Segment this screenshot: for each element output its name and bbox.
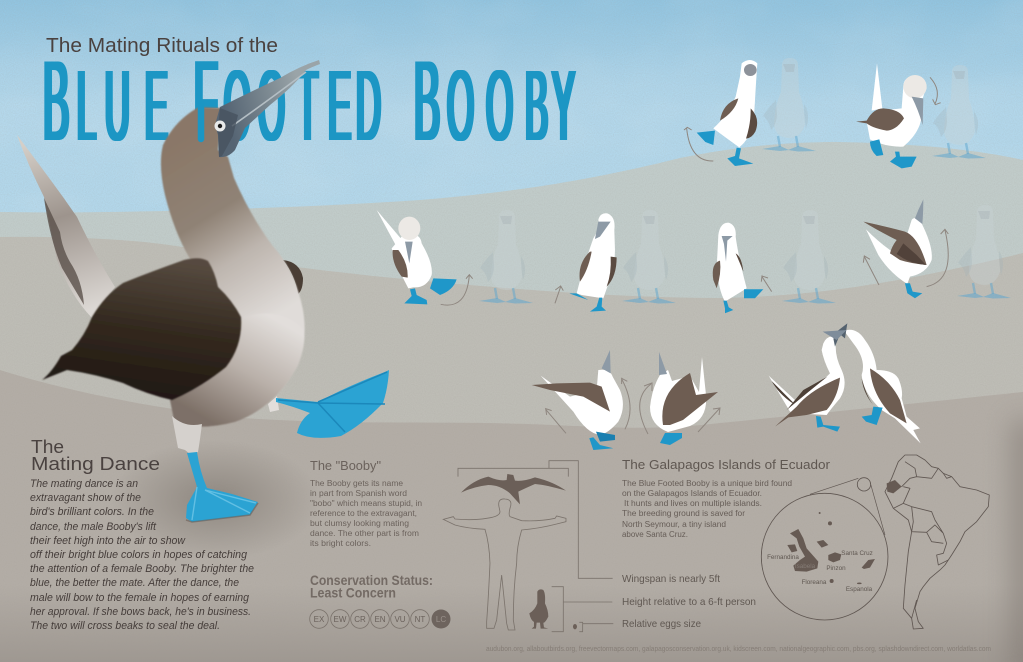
- title: B: [414, 38, 440, 165]
- ghost bird row 2 first: [479, 210, 533, 304]
- thigh feathers: [172, 416, 202, 454]
- text: galapagos description: It hunts and lives on multiple islands.: [624, 499, 762, 508]
- conservation status scale: NT: [415, 615, 425, 624]
- size comparison labels: Relative eggs size: [622, 618, 701, 630]
- heading: the mating dance: Mating Dance: [31, 454, 160, 474]
- subtitle: The Mating Rituals of the: [46, 35, 278, 57]
- heading: the booby: The "Booby": [310, 459, 381, 473]
- body and neck: [161, 107, 305, 427]
- text: mating dance description: their feet high into the air to show: [30, 535, 186, 547]
- text: mating dance description: male will bow to the female in hopes of earning: [30, 592, 250, 604]
- tail feather: [17, 135, 115, 318]
- text: mating dance description: [30, 478, 254, 632]
- title stroke passing over head: [198, 104, 204, 139]
- map labels: Pinzon: [826, 565, 846, 572]
- wing: [42, 258, 241, 400]
- head face and beak: [215, 60, 320, 157]
- heading: the mating dance: [31, 437, 160, 474]
- heading: conservation status: Conservation Status:: [310, 573, 433, 588]
- conservation status scale: LC: [436, 615, 446, 624]
- map labels: Isabela: [795, 563, 816, 570]
- text: mating dance description: The two will cross beaks to seal the deal.: [30, 620, 220, 632]
- title: [43, 38, 575, 165]
- dance step: one foot lifted, looking left: [555, 213, 617, 312]
- text: mating dance description: bird's brilliant colors. In the: [30, 506, 154, 518]
- map labels: Floreana: [802, 579, 827, 586]
- text: booby name origin: in part from Spanish word: [310, 489, 407, 498]
- text: galapagos description: above Santa Cruz.: [622, 530, 688, 539]
- heading: conservation status: Least Concern: [310, 586, 396, 600]
- dance step: head bowed, facing right: [856, 63, 941, 168]
- text: booby name origin: reference to the extravagant,: [310, 509, 417, 518]
- map labels: [767, 550, 873, 593]
- size comparison labels: [622, 573, 756, 630]
- dance step: bowing bird right: [640, 352, 720, 445]
- heading: the mating dance: The: [31, 437, 64, 457]
- dance step: bowing bird left: [532, 350, 630, 450]
- text: booby name origin: dance. The other part is from: [310, 529, 419, 538]
- ghost bird row 2 third: [782, 210, 836, 304]
- size comparison diagram: [443, 461, 613, 632]
- conservation status scale: CR: [354, 615, 366, 624]
- ghost bird row 2 fourth: [957, 205, 1011, 298]
- dance step: foot raised, facing right: [684, 60, 757, 166]
- title: OOBY: [447, 49, 575, 161]
- text: mating dance description: dance, the male Booby's lift: [30, 521, 157, 533]
- conservation status scale: EW: [334, 615, 347, 624]
- egg: [573, 624, 577, 629]
- text: galapagos description: The Blue Footed Booby is a unique bird found: [622, 479, 792, 488]
- text: booby name origin: but clumsy looking mating: [310, 519, 409, 528]
- raised blue foot: [276, 370, 389, 438]
- map labels: Santa Cruz: [841, 550, 873, 557]
- bird silhouette: [529, 589, 548, 629]
- heading: galapagos: The Galapagos Islands of Ecuador: [622, 457, 831, 472]
- dance step: wings spread, beak up: [863, 199, 948, 298]
- text: booby name origin: [310, 479, 422, 548]
- size comparison labels: Height relative to a 6-ft person: [622, 596, 756, 608]
- dance step: foot lifted, facing viewer: [713, 223, 772, 313]
- text: booby name origin: its bright colors.: [310, 539, 371, 548]
- pair crossing beaks: [769, 323, 921, 443]
- ghost bird row 1 left: [762, 58, 816, 152]
- eye: [214, 120, 226, 132]
- main bird illustration: [17, 60, 389, 522]
- bracket lines: [458, 461, 613, 632]
- map: south america: [761, 455, 989, 629]
- source credits: audubon.org, allaboutbirds.org, freevectormaps.com, galapagosconservation.org.uk, kidscreen.com, nationalgeographic.com, pbs.org, splashdowndirect.com, worldatlas.com: [486, 646, 991, 653]
- conservation status scale: [310, 610, 450, 628]
- islands: [790, 529, 818, 572]
- text: galapagos description: [622, 479, 792, 539]
- conservation status scale: EX: [314, 615, 325, 624]
- text: mating dance description: blue, the better the mate. After the dance, the: [30, 577, 239, 589]
- text: galapagos description: The breeding ground is saved for: [622, 509, 745, 518]
- text: mating dance description: extravagant show of the: [30, 492, 141, 504]
- ghost bird row 2 second: [622, 210, 676, 304]
- text: mating dance description: the attention of a female Booby. The brighter the: [30, 563, 254, 575]
- title: OOTED: [224, 49, 381, 161]
- ghost bird row 1 right: [932, 65, 986, 158]
- dance step: foot raised, head down: [377, 210, 473, 305]
- inset pointer and zoom circle: [857, 478, 871, 491]
- text: booby name origin: The Booby gets its name: [310, 479, 404, 488]
- standing blue foot: [186, 452, 258, 522]
- person outline: [443, 499, 566, 630]
- text: booby name origin: "bobo" which means stupid, in: [310, 499, 422, 508]
- text: mating dance description: off their bright blue colors in hopes of catching: [30, 549, 248, 561]
- conservation status scale: EN: [374, 615, 386, 624]
- far wing: [283, 260, 303, 294]
- text: mating dance description: The mating dance is an: [30, 478, 138, 490]
- title: LUE: [77, 49, 168, 161]
- map labels: Fernandina: [767, 554, 799, 561]
- wingspan silhouette: [461, 474, 566, 504]
- title: F: [194, 38, 218, 165]
- heading: conservation status: [310, 573, 433, 600]
- text: mating dance description: her approval. If she bows back, he's in business.: [30, 606, 251, 618]
- text: galapagos description: North Seymour, a tiny island: [622, 520, 726, 529]
- size comparison labels: Wingspan is nearly 5ft: [622, 573, 720, 585]
- conservation status scale: VU: [394, 615, 406, 624]
- title: B: [43, 38, 69, 165]
- map labels: Espanola: [846, 586, 873, 593]
- text: galapagos description: on the Galapagos Islands of Ecuador.: [622, 489, 762, 498]
